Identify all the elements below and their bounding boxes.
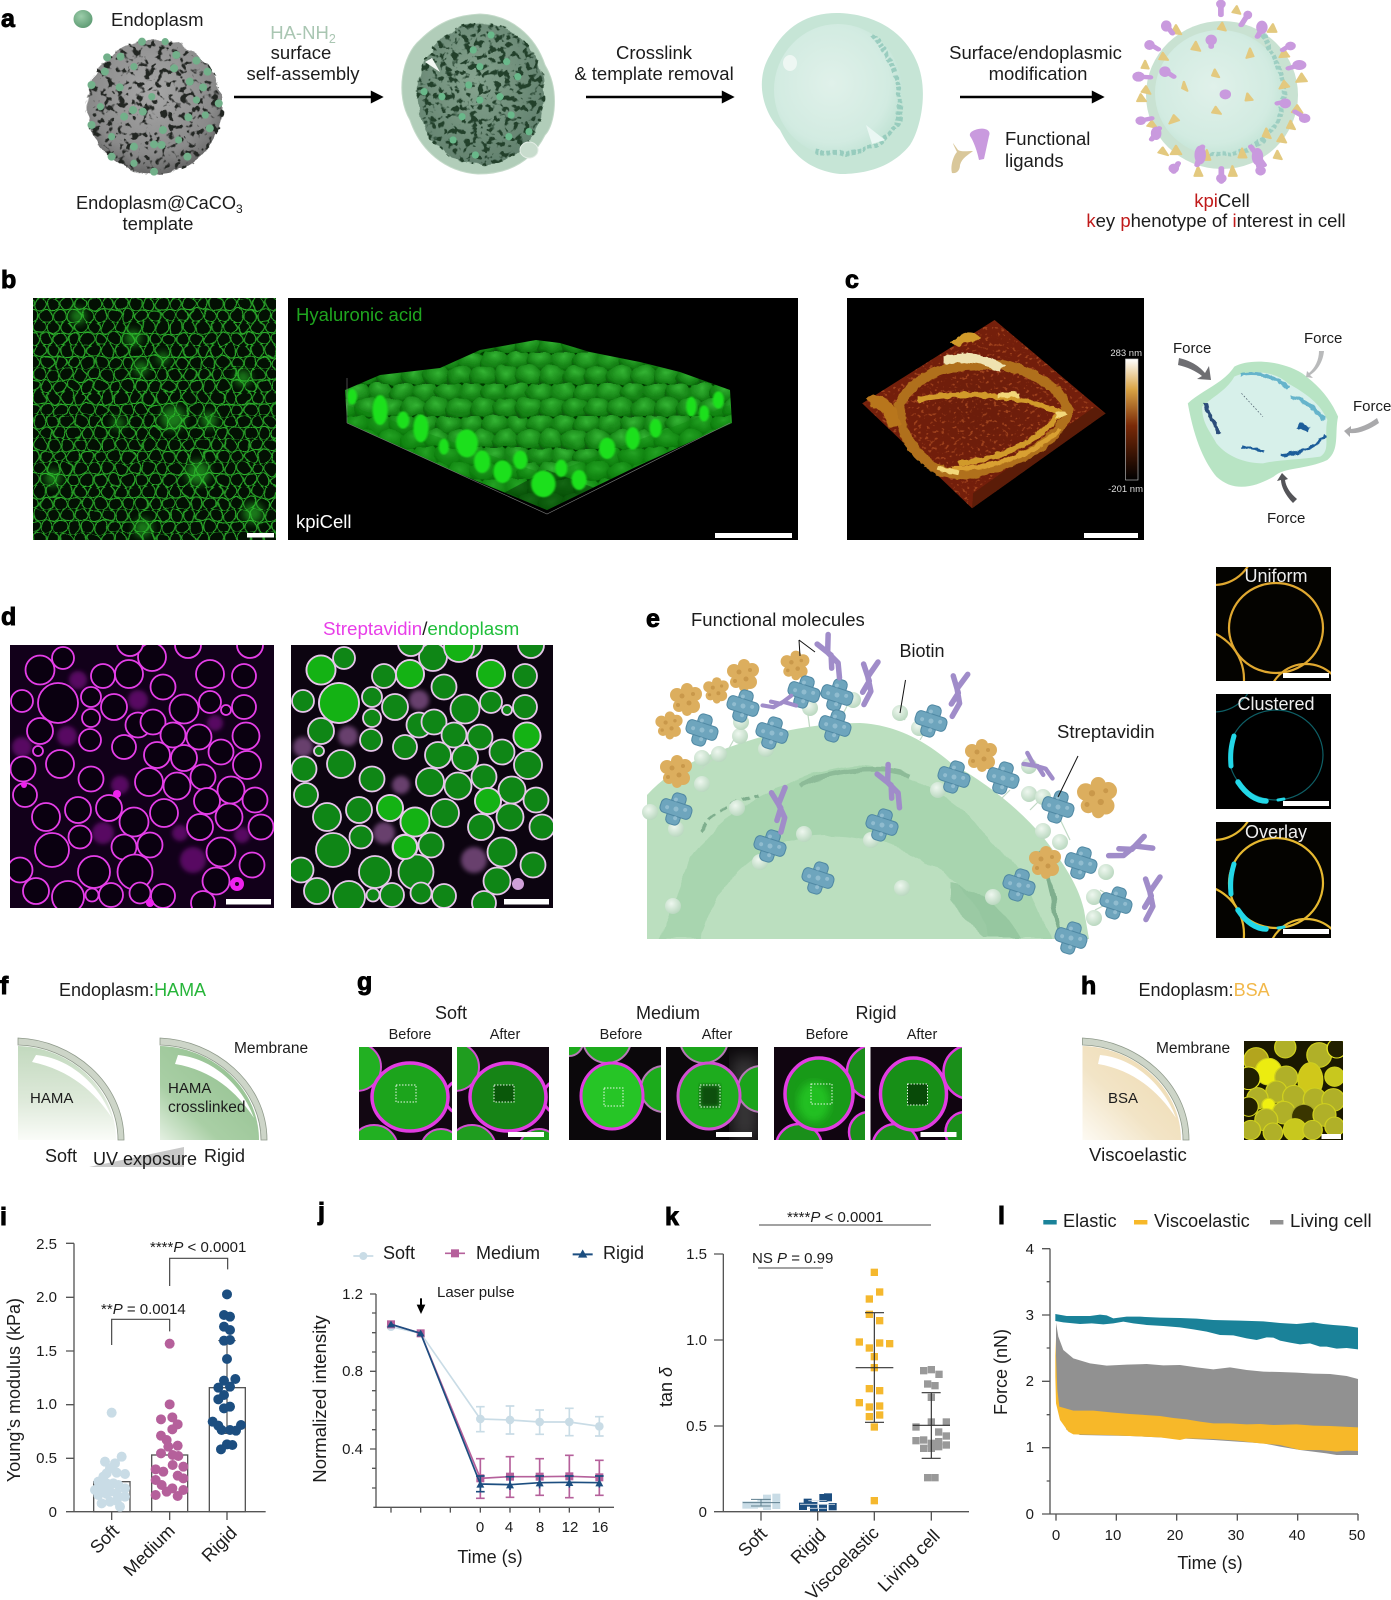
x tick labels: 50 xyxy=(1349,1527,1365,1544)
y tick labels: 0 xyxy=(699,1504,707,1521)
image: yellow BSA confocal xyxy=(1244,1041,1343,1140)
inset: Uniform xyxy=(1216,566,1331,681)
group titles: Soft xyxy=(435,1003,467,1023)
y tick labels: 1.0 xyxy=(36,1396,57,1413)
text: Membrane: Membrane xyxy=(234,1040,308,1057)
x tick labels: 30 xyxy=(1228,1527,1244,1544)
x category labels: Soft xyxy=(86,1521,123,1557)
x tick labels: 16 xyxy=(592,1519,608,1536)
scale bar xyxy=(715,533,792,538)
arrow: force bottom xyxy=(1277,473,1297,503)
x category labels: Medium xyxy=(119,1521,179,1580)
y tick labels: 1.0 xyxy=(686,1332,707,1349)
image: soft before xyxy=(359,1047,452,1140)
gradient wedge: UV exposure: UV exposure xyxy=(93,1149,197,1169)
x tick labels: 8 xyxy=(536,1519,544,1536)
sphere: coated template xyxy=(402,14,554,174)
panel: b xyxy=(1,266,798,550)
inset: Clustered: Clustered xyxy=(1237,694,1315,714)
panel label b: b xyxy=(1,266,16,294)
x tick labels: 0 xyxy=(476,1519,484,1536)
force labels: Force xyxy=(1304,330,1342,347)
callout: Biotin: Biotin xyxy=(900,641,945,661)
x tick labels xyxy=(1052,1527,1365,1544)
sphere: hollow shell xyxy=(762,13,923,174)
force labels: Force xyxy=(1173,340,1211,357)
arrow: force top right xyxy=(1306,351,1324,378)
line chart: normalized intensity xyxy=(370,1294,614,1513)
area chart: force relaxation xyxy=(1042,1249,1358,1521)
text: Rigid: Rigid xyxy=(204,1146,245,1166)
panel label e: e xyxy=(646,605,660,633)
legend: Viscoelastic xyxy=(1154,1211,1250,1231)
y tick labels: 1 xyxy=(1026,1439,1034,1456)
callout: Functional molecules: Functional molecules xyxy=(691,609,865,630)
scale bar xyxy=(1283,929,1329,934)
icon: functional ligands xyxy=(951,129,990,173)
icon: endoplasm dot xyxy=(74,10,92,28)
scale bar xyxy=(920,1132,956,1137)
x axis title: Time (s) xyxy=(457,1547,523,1567)
panel: c xyxy=(845,266,1391,540)
schematic: crosslinked HAMA: HAMA xyxy=(168,1080,211,1097)
scale bar xyxy=(1283,801,1329,806)
arrow 2 xyxy=(586,92,732,102)
panel label k: k xyxy=(665,1203,679,1231)
x category labels: Soft xyxy=(734,1524,771,1560)
colour bar xyxy=(1126,359,1138,480)
text: HA-NH2 surface self-assembly: self-assembly xyxy=(246,63,360,84)
bar chart: Young's modulus xyxy=(66,1243,266,1520)
panel label a: a xyxy=(1,5,16,33)
text: Endoplasm@CaCO3 template xyxy=(76,193,243,234)
significance: P<0.0001: ****P < 0.0001 xyxy=(787,1209,883,1226)
panel: d xyxy=(1,603,554,915)
x category labels: Rigid xyxy=(787,1525,830,1568)
text: kpiCell caption: key phenotype of interest in cell xyxy=(1086,210,1346,231)
image: rigid after xyxy=(870,1047,962,1140)
inset: Clustered xyxy=(1216,694,1331,809)
text: HA-NH2 surface self-assembly: 2 xyxy=(329,32,336,46)
x tick labels xyxy=(476,1519,608,1536)
heading: Endoplasm:HAMA: Endoplasm:HAMA xyxy=(59,980,206,1000)
text: Membrane: Membrane xyxy=(1156,1040,1230,1057)
panel: j chart xyxy=(309,1198,644,1567)
beads and tethers xyxy=(642,692,1125,926)
panel: i chart xyxy=(0,1203,266,1580)
panel label l: l xyxy=(998,1202,1005,1230)
text: Endoplasm@CaCO3 template: template xyxy=(123,213,193,234)
schematic: crosslinked HAMA xyxy=(160,1038,267,1140)
callout: Streptavidin: Streptavidin xyxy=(1057,721,1155,742)
inset: Overlay: Overlay xyxy=(1245,822,1307,842)
panel: h xyxy=(1081,972,1347,1165)
y tick labels: 2 xyxy=(1026,1373,1034,1390)
y axis title: Normalized intensity xyxy=(309,1315,330,1483)
image: soft after xyxy=(457,1047,549,1140)
x tick labels: 40 xyxy=(1289,1527,1305,1544)
panel label g: g xyxy=(357,968,372,996)
force labels: Force xyxy=(1353,398,1391,415)
panel label h: h xyxy=(1081,972,1096,1000)
panel label i: i xyxy=(0,1203,7,1231)
scale bar xyxy=(1283,673,1329,678)
callout: Biotin xyxy=(900,641,945,713)
arrow 1 xyxy=(234,92,381,102)
force labels xyxy=(1173,330,1391,527)
before and after labels: Before xyxy=(806,1027,848,1043)
significance labels xyxy=(101,1239,246,1318)
y tick labels: 3 xyxy=(1026,1307,1034,1324)
text: Endoplasm: Endoplasm xyxy=(111,9,204,30)
legend: Rigid xyxy=(603,1243,644,1263)
colour bar labels: -201 nm xyxy=(1108,484,1143,495)
before and after labels: After xyxy=(490,1027,520,1043)
schematic: BSA viscoelastic xyxy=(1082,1038,1189,1140)
schematic: soft HAMA xyxy=(18,1038,124,1140)
before and after labels: After xyxy=(907,1027,937,1043)
y tick labels xyxy=(36,1236,57,1521)
panel: f xyxy=(0,972,308,1169)
y tick labels: 4 xyxy=(1026,1241,1034,1258)
before and after labels: Before xyxy=(389,1027,431,1043)
y tick labels: 1.2 xyxy=(342,1286,363,1303)
y tick labels: 2.5 xyxy=(36,1236,57,1253)
colour bar labels xyxy=(1108,348,1143,495)
image: streptavidin magenta channel xyxy=(10,645,274,908)
text: Functional ligands: ligands xyxy=(1005,150,1064,171)
significance labels: **P = 0.0014 xyxy=(101,1301,186,1318)
legend xyxy=(1043,1210,1372,1231)
image: 3D confocal reconstruction xyxy=(288,298,798,540)
inset: Uniform: Uniform xyxy=(1244,566,1308,586)
heading: Streptavidin/endoplasm: Streptavidin/endoplasm xyxy=(323,618,519,639)
text: HA-NH2 surface self-assembly: surface xyxy=(271,42,331,63)
text: Crosslink & template removal: & template removal xyxy=(574,63,734,84)
x tick labels: 0 xyxy=(1052,1527,1060,1544)
text: Surface/endoplasmic modification: Surface/endoplasmic xyxy=(949,42,1122,63)
text: Surface/endoplasmic modification xyxy=(949,42,1122,84)
y axis title: Young’s modulus (kPa) xyxy=(4,1298,24,1482)
gold functional molecules xyxy=(655,651,1117,879)
y tick labels: 1.5 xyxy=(686,1246,707,1263)
panel: k chart xyxy=(656,1203,969,1600)
y axis title: Force (nN) xyxy=(991,1329,1011,1415)
x category labels xyxy=(86,1521,241,1580)
y tick labels: 0.5 xyxy=(686,1418,707,1435)
arrow 3 xyxy=(960,92,1102,102)
legend: Soft xyxy=(383,1243,415,1263)
y tick labels: 0.4 xyxy=(342,1441,363,1458)
legend xyxy=(353,1243,644,1263)
x category labels: Living cell xyxy=(874,1526,944,1596)
image: streptavidin endoplasm overlay xyxy=(291,645,553,908)
significance labels: ****P < 0.0001 xyxy=(150,1239,246,1256)
text: Surface/endoplasmic modification: modification xyxy=(989,63,1087,84)
group titles xyxy=(435,1003,897,1023)
scale bar xyxy=(247,533,274,538)
legend: Elastic xyxy=(1063,1211,1117,1231)
scale bar xyxy=(1084,533,1138,538)
sphere: kpiCell with ligands xyxy=(1132,0,1310,183)
panel: a workflow xyxy=(1,0,1346,234)
streptavidin crosses xyxy=(656,672,1136,958)
text: kpiCell caption xyxy=(1086,190,1346,231)
legend: Medium xyxy=(476,1243,540,1263)
text: Crosslink & template removal: Crosslink xyxy=(616,42,693,63)
y tick labels: 0 xyxy=(49,1504,57,1521)
text: HA-NH2 surface self-assembly xyxy=(246,22,360,84)
before and after labels: After xyxy=(702,1027,732,1043)
3D block of green domes xyxy=(345,340,732,514)
y tick labels xyxy=(342,1286,363,1458)
illustration: cell surface with ligands xyxy=(642,635,1160,958)
x axis title: Time (s) xyxy=(1177,1553,1243,1573)
text: Hyaluronic acid: Hyaluronic acid xyxy=(296,304,422,325)
text: Functional ligands xyxy=(1005,128,1090,171)
AFM diamond xyxy=(859,317,1109,513)
text: Functional ligands: Functional xyxy=(1005,128,1090,149)
image: medium after xyxy=(666,1047,758,1140)
schematic: BSA viscoelastic: BSA xyxy=(1108,1090,1138,1107)
group titles: Medium xyxy=(636,1003,700,1023)
schematic: crosslinked HAMA: crosslinked xyxy=(168,1099,246,1116)
panel label f: f xyxy=(0,972,9,1000)
text: Endoplasm@CaCO3 template: 3 xyxy=(236,202,243,216)
scatter plot: tan delta xyxy=(714,1254,969,1521)
text: kpiCell: kpiCell xyxy=(296,511,352,532)
y tick labels xyxy=(1026,1241,1034,1523)
image: rigid before xyxy=(774,1047,865,1140)
inset: Overlay xyxy=(1216,822,1331,938)
schematic: soft HAMA: HAMA xyxy=(30,1090,73,1107)
image: AFM surface xyxy=(847,298,1144,540)
x category labels: Rigid xyxy=(198,1523,241,1566)
x tick labels: 4 xyxy=(505,1519,513,1536)
group titles: Rigid xyxy=(855,1003,897,1023)
image: medium before xyxy=(569,1047,661,1140)
scale bar xyxy=(226,899,271,904)
x tick labels: 10 xyxy=(1105,1527,1121,1544)
arrow: force right xyxy=(1344,418,1379,437)
scale bar xyxy=(1322,1134,1341,1139)
sphere: Endoplasm CaCO3 template xyxy=(85,38,224,176)
y tick labels: 0 xyxy=(1026,1506,1034,1523)
y tick labels: 0.5 xyxy=(36,1450,57,1467)
panel label j: j xyxy=(317,1198,325,1226)
before and after labels xyxy=(389,1027,937,1043)
scale bar xyxy=(508,1132,544,1137)
text: Soft: Soft xyxy=(45,1146,77,1166)
text: Viscoelastic: Viscoelastic xyxy=(1089,1144,1187,1165)
force labels: Force xyxy=(1267,510,1305,527)
before and after labels: Before xyxy=(600,1027,642,1043)
image: confocal honeycomb xyxy=(33,298,276,540)
y tick labels: 0.8 xyxy=(342,1363,363,1380)
panel: g xyxy=(333,968,998,1173)
panel label d: d xyxy=(1,603,16,631)
text: Endoplasm@CaCO3 template: Endoplasm@CaCO xyxy=(76,193,236,213)
text: HA-NH2 surface self-assembly: HA-NH xyxy=(270,22,329,43)
x category labels xyxy=(734,1523,944,1600)
schematic: force on cell xyxy=(1173,330,1391,527)
panel label c: c xyxy=(845,266,859,294)
annotation: Laser pulse: Laser pulse xyxy=(437,1284,515,1301)
y tick labels: 1.5 xyxy=(36,1343,57,1360)
callout: Streptavidin xyxy=(1057,721,1155,797)
text: Crosslink & template removal xyxy=(574,42,734,84)
x tick labels: 20 xyxy=(1167,1527,1183,1544)
panel: l chart xyxy=(991,1202,1372,1573)
colour bar labels: 283 nm xyxy=(1110,348,1142,359)
heading: Endoplasm:BSA: Endoplasm:BSA xyxy=(1138,980,1270,1000)
y tick labels xyxy=(686,1246,707,1521)
scale bar xyxy=(504,899,549,904)
x tick labels: 12 xyxy=(562,1519,578,1536)
scale bar xyxy=(716,1132,752,1137)
callout: Functional molecules xyxy=(691,609,865,656)
significance: NS: NS P = 0.99 xyxy=(752,1250,833,1267)
y tick labels: 2.0 xyxy=(36,1289,57,1306)
text: kpiCell caption: kpiCell xyxy=(1194,190,1250,211)
panel: e xyxy=(642,567,1331,955)
arrow: force top left xyxy=(1178,358,1211,380)
legend: Living cell xyxy=(1290,1210,1372,1231)
y axis title: tan δ xyxy=(656,1366,676,1407)
purple functional molecules xyxy=(762,635,1160,921)
